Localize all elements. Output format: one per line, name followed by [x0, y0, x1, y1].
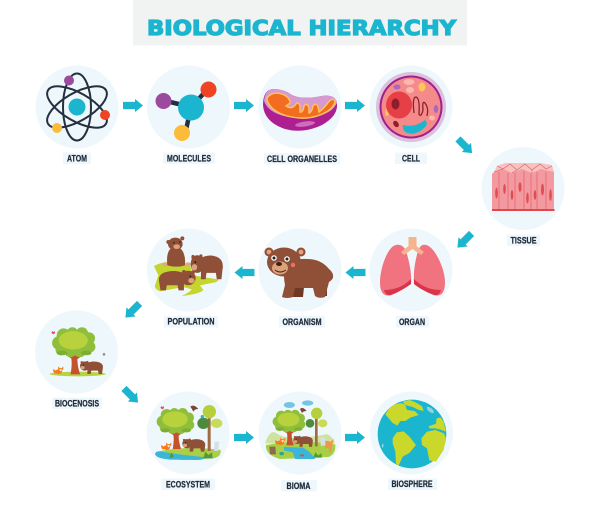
icon: bear population	[154, 236, 223, 296]
icon: bioma landscape	[265, 400, 335, 459]
icon: cell	[376, 72, 446, 142]
label: cell: CELL	[402, 153, 420, 163]
arrow: biocenosis to ecosystem	[119, 384, 143, 407]
icon: molecule	[156, 82, 216, 141]
icon: atom	[41, 74, 113, 140]
icon: tissue	[492, 163, 554, 211]
label: ecosystem: ECOSYSTEM	[166, 479, 210, 489]
icon: mitochondrion	[263, 89, 337, 131]
panel: biocenosis	[35, 310, 118, 409]
arrow: atom to molecules	[123, 99, 143, 112]
panel: cell	[370, 66, 452, 164]
label: bioma: BIOMA	[286, 481, 311, 491]
label: molecules: MOLECULES	[167, 153, 211, 163]
arrow: tissue to organ	[453, 229, 476, 252]
label: cell organelles: CELL ORGANELLES	[267, 154, 337, 164]
arrow: organism to population	[234, 266, 254, 279]
panel: ecosystem	[146, 392, 230, 490]
arrow: cell to tissue	[453, 134, 477, 158]
panel: biosphere	[370, 392, 453, 490]
icon: earth	[378, 400, 446, 468]
panel: molecules	[147, 66, 230, 164]
arrow: organ to organism	[346, 266, 366, 279]
arrow: bioma to biosphere	[345, 431, 365, 444]
panel: organism	[258, 228, 342, 328]
panel: tissue	[482, 147, 564, 246]
title	[133, 0, 467, 46]
panel: atom	[36, 66, 118, 164]
label: tissue: TISSUE	[510, 235, 536, 245]
title: BIOLOGICAL HIERARCHY	[147, 16, 457, 40]
arrow: molecules to cell organelles	[234, 99, 254, 112]
label: organ: ORGAN	[399, 317, 425, 327]
label: atom: ATOM	[67, 153, 87, 163]
label: organism: ORGANISM	[282, 317, 322, 327]
icon: tree, bear and fox	[50, 327, 106, 376]
label: biosphere: BIOSPHERE	[392, 479, 432, 489]
label: biocenosis: BIOCENOSIS	[55, 398, 99, 408]
panel: population	[147, 228, 230, 328]
panel: bioma	[258, 392, 342, 492]
arrow: ecosystem to bioma	[234, 431, 254, 444]
panel: cell organelles	[258, 66, 342, 164]
icon: bear	[264, 248, 333, 298]
icon: lungs	[380, 237, 445, 295]
icon: forest ecosystem	[155, 405, 222, 460]
arrow: cell organelles to cell	[345, 99, 365, 112]
panel: organ	[370, 228, 452, 328]
arrow: population to biocenosis	[121, 299, 144, 322]
label: population: POPULATION	[168, 316, 214, 326]
